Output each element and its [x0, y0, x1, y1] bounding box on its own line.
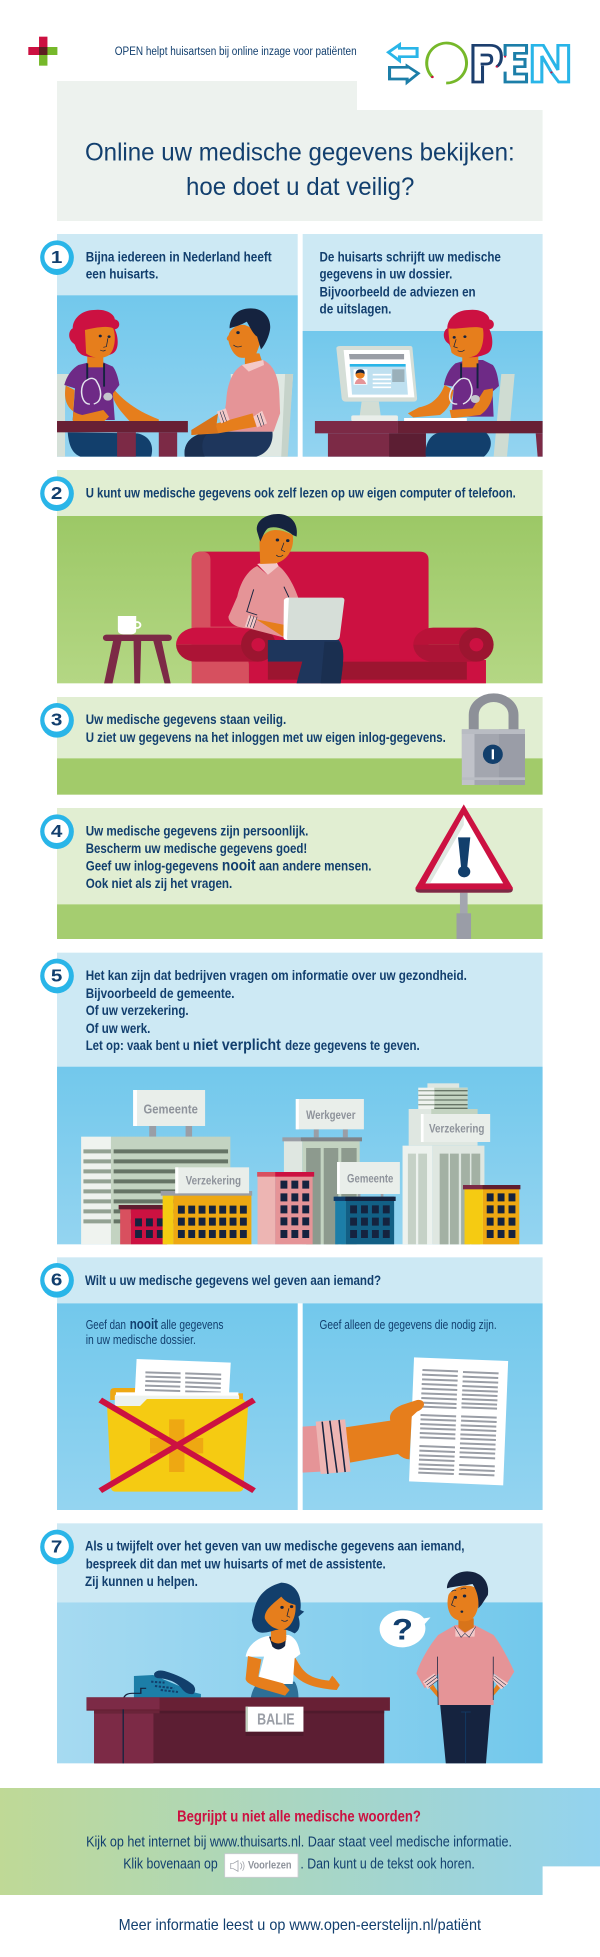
panel: step 6 right	[303, 1303, 543, 1510]
table	[57, 421, 188, 457]
building: blue Gemeente: Gemeente	[347, 1172, 393, 1185]
panel: step 1 left	[40, 234, 298, 457]
icon: step number 6	[40, 1263, 74, 1298]
building: yellow right	[463, 1185, 520, 1244]
patient	[185, 308, 280, 457]
step 6 left text: in uw medische dossier.	[86, 1333, 196, 1347]
icon: step number 5: 5	[51, 966, 63, 986]
step 6 left text: alle gegevens	[161, 1318, 224, 1332]
building: grey office Werkgever	[282, 1099, 364, 1244]
icon: step number 3	[40, 703, 74, 738]
illustration: side table with cup	[103, 616, 172, 683]
icon: step number 7	[40, 1530, 74, 1564]
building: Gemeente large: Gemeente	[143, 1102, 198, 1117]
panel: step 6 left	[57, 1303, 298, 1510]
icon: step number 2: 2	[51, 483, 62, 504]
step 4 text: aan andere mensen.	[259, 860, 372, 874]
building: tall tower Verzekering: Verzekering	[429, 1121, 485, 1135]
illustration: speech bubble with question mark: ?	[392, 1612, 413, 1646]
step 4 text: Ook niet als zij het vragen.	[86, 877, 232, 892]
icon: step number 1: 1	[51, 247, 63, 268]
illustration: sofa	[176, 552, 494, 683]
building: red	[119, 1205, 169, 1244]
icon: step number 3: 3	[51, 710, 63, 730]
icon: step number 7: 7	[51, 1537, 62, 1557]
step 5 text: Of uw werk.	[86, 1022, 150, 1037]
building: blue Gemeente	[334, 1162, 400, 1244]
callout band	[0, 1788, 600, 1895]
panel: step 5	[40, 953, 543, 1244]
illustration: man with question	[416, 1571, 514, 1763]
step 3 text: U ziet uw gegevens na het inloggen met uw eigen inlog-gegevens.	[86, 731, 446, 746]
panel: step 1	[40, 234, 543, 457]
step 6 heading: Wilt u uw medische gegevens wel geven aan iemand?	[85, 1274, 381, 1289]
title text: Online uw medische gegevens bekijken:	[85, 137, 515, 166]
step 3 text: Uw medische gegevens staan veilig.	[86, 713, 286, 728]
step 5 text: Het kan zijn dat bedrijven vragen om informatie over uw gezondheid.	[86, 969, 467, 984]
header	[28, 37, 569, 83]
building: Gemeente large	[81, 1090, 230, 1244]
illustration: telephone	[123, 1671, 201, 1763]
step 1 right text: De huisarts schrijft uw medische	[320, 251, 501, 265]
desk	[315, 421, 543, 457]
footer text: Meer informatie leest u op www.open-eerstelijn.nl/patiënt	[119, 1917, 481, 1934]
title text	[85, 137, 515, 201]
step 5 text: niet verplicht	[193, 1036, 281, 1054]
step 6 left text: nooit	[130, 1317, 159, 1333]
illustration: crossed out folder	[100, 1359, 254, 1492]
step 1 right text	[320, 251, 501, 317]
sofa armrest right	[413, 628, 494, 662]
icon: padlock	[462, 698, 525, 785]
step 7 text	[85, 1540, 465, 1590]
sofa armrest left	[176, 628, 276, 662]
icon: step number 4: 4	[51, 821, 63, 842]
building: grey office Werkgever: Werkgever	[306, 1108, 355, 1122]
logo: OPEN	[388, 43, 569, 83]
step 6 left text: Geef dan	[86, 1318, 126, 1332]
doctor	[408, 310, 499, 418]
building: yellow Verzekering	[161, 1167, 252, 1244]
step 5 text: Bijvoorbeeld de gemeente.	[86, 987, 235, 1002]
step 6 left text	[86, 1317, 224, 1347]
title panel	[57, 81, 543, 221]
panel: step 7	[0, 1523, 600, 1934]
button: Voorlezen: Voorlezen	[248, 1860, 292, 1871]
step 7 text: Als u twijfelt over het geven van uw medische gegevens aan iemand,	[85, 1540, 465, 1554]
desk label: BALIE	[257, 1709, 295, 1728]
step 4 text: Bescherm uw medische gegevens goed!	[86, 842, 307, 857]
callout heading: Begrijpt u niet alle medische woorden?	[177, 1808, 421, 1825]
step 3 text	[86, 713, 446, 746]
step 7 text: Zij kunnen u helpen.	[85, 1575, 198, 1590]
building: pink	[257, 1172, 314, 1244]
step 4 text: Geef uw inlog-gegevens	[86, 860, 218, 874]
icon: step number 4	[40, 814, 74, 849]
doctor	[64, 310, 159, 457]
illustration: receptionist	[246, 1583, 340, 1698]
button: Voorlezen	[225, 1854, 298, 1877]
step 1 left text: Bijna iedereen in Nederland heeft	[86, 251, 272, 265]
step 5 text: deze gegevens te geven.	[285, 1039, 420, 1054]
icon: medical cross	[28, 37, 57, 66]
panel: step 4	[40, 804, 543, 939]
illustration: man with laptop	[228, 514, 344, 683]
callout text: Klik bovenaan op	[123, 1857, 218, 1872]
step 5 text: Let op: vaak bent u	[86, 1039, 190, 1054]
step 1 right text: gegevens in uw dossier.	[320, 268, 452, 282]
step 6 right text: Geef alleen de gegevens die nodig zijn.	[320, 1318, 497, 1332]
desk label	[246, 1707, 303, 1732]
building: yellow Verzekering: Verzekering	[186, 1173, 241, 1187]
header tagline: OPEN helpt huisartsen bij online inzage voor patiënten	[115, 45, 357, 58]
panel: step 2	[40, 470, 543, 683]
illustration: speech bubble with question mark	[380, 1610, 430, 1647]
keyboard	[404, 418, 467, 421]
step 4 text: Uw medische gegevens zijn persoonlijk.	[86, 825, 308, 839]
step 1 right text: de uitslagen.	[320, 303, 391, 317]
illustration: chairs and doctor consultation	[57, 308, 293, 457]
step 1 left text: een huisarts.	[86, 268, 158, 282]
icon: step number 5	[40, 959, 74, 993]
step 5 text	[86, 969, 467, 1054]
step 1 left text	[86, 251, 272, 282]
step 5 text: Of uw verzekering.	[86, 1004, 189, 1019]
panel: step 3	[40, 697, 543, 795]
icon: step number 2	[40, 476, 74, 511]
step 4 text: nooit	[222, 857, 256, 874]
building: tall tower Verzekering	[403, 1083, 490, 1244]
illustration: doctor at computer	[315, 310, 543, 457]
step 7 text: bespreek dit dan met uw huisarts of met de assistente.	[86, 1558, 386, 1572]
icon: warning sign	[415, 804, 513, 939]
panel: step 1 right	[303, 234, 543, 457]
icon: step number 6: 6	[51, 1270, 63, 1290]
panel: step 6	[40, 1257, 543, 1510]
illustration: hand holding paper	[303, 1357, 508, 1485]
callout text: . Dan kunt u de tekst ook horen.	[300, 1857, 475, 1872]
illustration: city buildings	[81, 1083, 520, 1244]
illustration: reception desk	[86, 1697, 390, 1763]
callout text	[86, 1835, 512, 1872]
step 1 right text: Bijvoorbeeld de adviezen en	[320, 286, 476, 300]
computer monitor	[336, 346, 417, 421]
title text: hoe doet u dat veilig?	[186, 172, 414, 201]
step 4 text	[86, 825, 372, 892]
icon: step number 1	[40, 240, 74, 275]
